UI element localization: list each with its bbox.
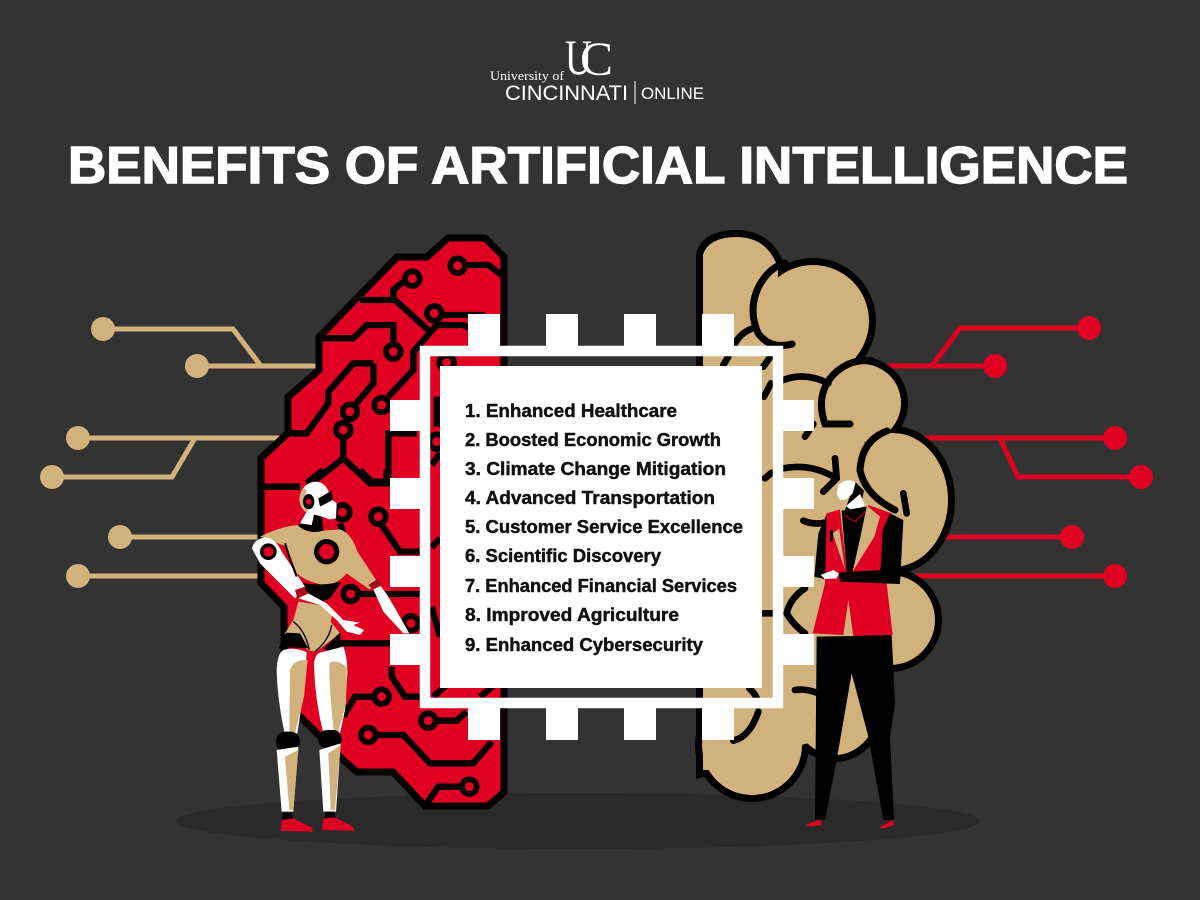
list of benefits: 4. Advanced Transportation <box>465 488 715 508</box>
circuit traces, lower <box>260 470 497 803</box>
brain silhouette fill <box>702 237 948 795</box>
businessman figure <box>806 480 903 829</box>
circuit traces, upper <box>260 258 502 487</box>
title: BENEFITS OF ARTIFICIAL INTELLIGENCE <box>68 137 1128 195</box>
logo: University of Cincinnati Online: U <box>565 29 592 85</box>
lobe overlap arcs <box>753 263 897 590</box>
ground shadow <box>176 793 980 849</box>
chip frame <box>425 351 778 703</box>
chip pins <box>390 314 814 740</box>
left connector traces <box>40 317 320 588</box>
list of benefits: 2. Boosted Economic Growth <box>465 430 721 450</box>
logo: University of Cincinnati Online: C <box>580 33 613 86</box>
list of benefits: 6. Scientific Discovery <box>465 546 661 566</box>
right connector traces <box>885 316 1153 588</box>
robot figure <box>252 482 409 832</box>
brain fold lines, lower <box>699 493 907 741</box>
list of benefits: 9. Enhanced Cybersecurity <box>465 635 703 655</box>
logo: University of Cincinnati Online <box>490 29 704 105</box>
brain silhouette outline <box>702 237 948 795</box>
chip: frame, pins and list panel <box>390 314 814 740</box>
list of benefits: 8. Improved Agriculture <box>465 605 679 625</box>
logo: University of Cincinnati Online: ONLINE <box>641 84 704 103</box>
list panel <box>440 366 762 688</box>
brain fold lines, upper <box>723 328 837 492</box>
list of benefits: 3. Climate Change Mitigation <box>465 459 726 479</box>
list of benefits: 1. Enhanced Healthcare <box>465 401 677 421</box>
logo: University of Cincinnati Online: University of <box>490 68 565 83</box>
list of benefits <box>465 401 743 655</box>
left brain: red circuit hemisphere <box>260 238 504 806</box>
list of benefits: 5. Customer Service Excellence <box>465 517 743 537</box>
logo: University of Cincinnati Online: CINCINNATI <box>505 82 628 105</box>
right brain: tan organic hemisphere <box>699 237 948 795</box>
list of benefits: 7. Enhanced Financial Services <box>465 576 737 596</box>
